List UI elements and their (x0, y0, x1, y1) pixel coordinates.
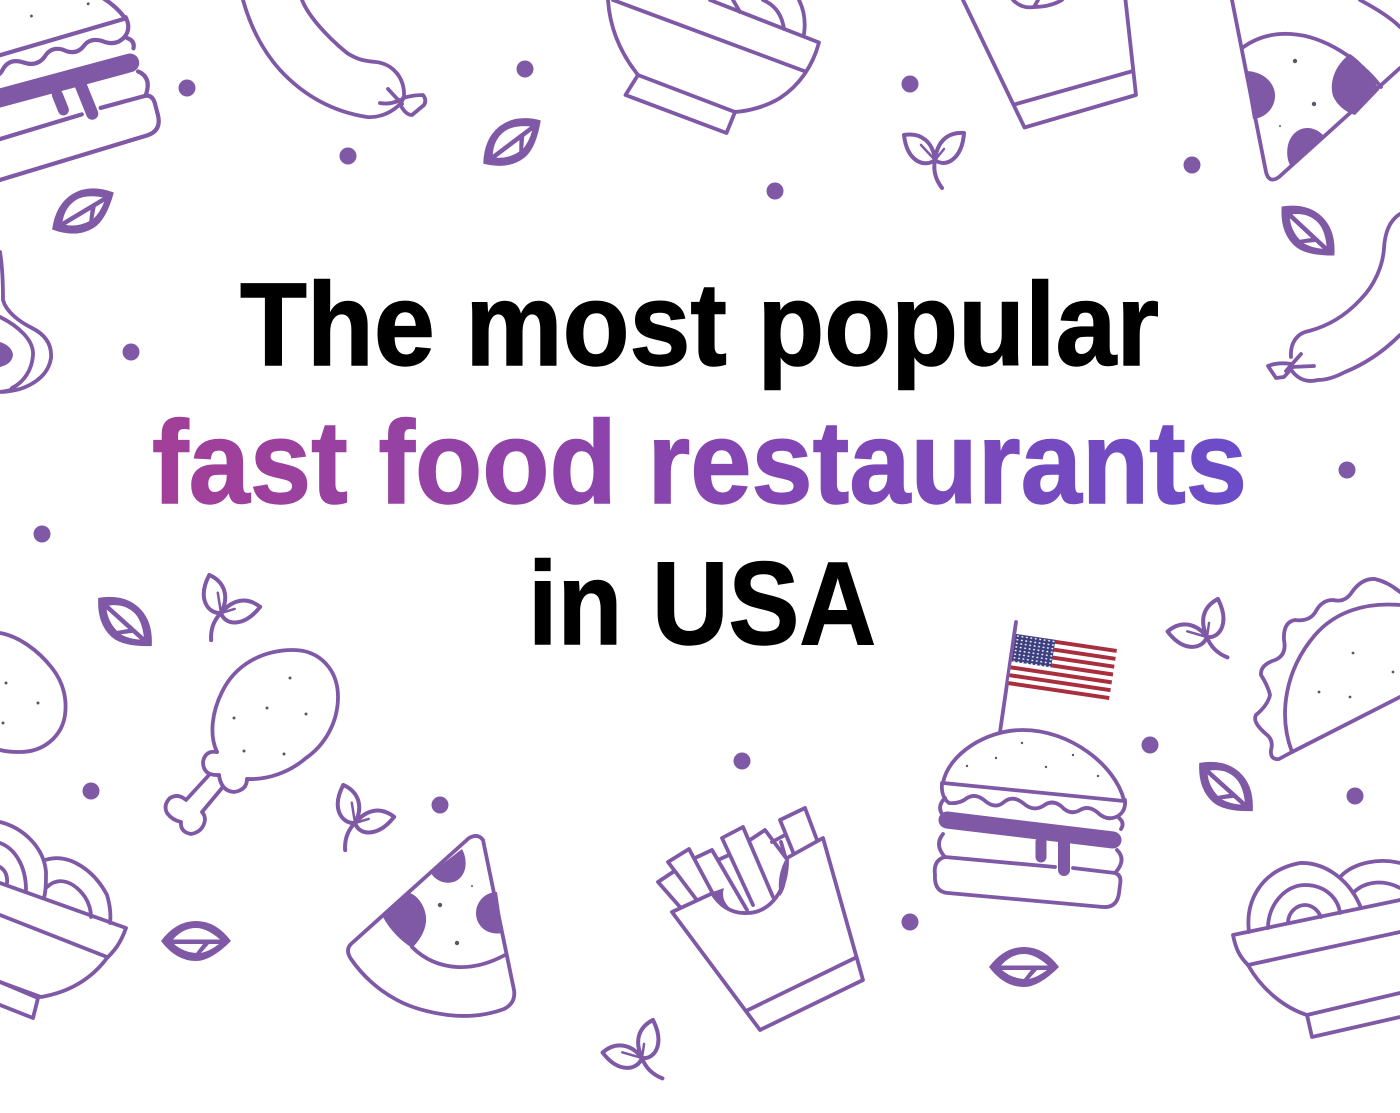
icon: leaf (161, 921, 231, 961)
icon: chicken leg (166, 650, 338, 834)
title line 2: fast food restaurants (152, 397, 1247, 529)
icon: bowl bottom right (1233, 861, 1400, 1037)
icon: leaf (471, 104, 553, 180)
flag pole (1000, 622, 1016, 732)
icon: bowl left (0, 822, 126, 1018)
icon: chicken drumstick left (0, 252, 51, 393)
icon: leaf (1186, 748, 1266, 826)
icon: sausage top (243, 0, 425, 117)
title (152, 259, 1247, 670)
icon: drink cup top (963, 0, 1136, 128)
icon: pizza bottom (348, 836, 514, 1016)
icon: sausage right (1268, 214, 1400, 381)
title line 3: in USA (528, 538, 876, 670)
American flag (1008, 634, 1117, 700)
icon: leaf (85, 583, 165, 661)
icon: burger top left (0, 0, 170, 205)
icon: leaf (42, 175, 124, 247)
icon: sprout (314, 783, 394, 862)
icon: sprout (180, 573, 260, 652)
icon: pizza top right (1232, 0, 1400, 180)
icon: taco (1255, 579, 1400, 759)
icon: bowl top (608, 0, 819, 133)
icon: potato left (0, 633, 66, 752)
decorative dots (34, 60, 1364, 930)
icon: sprout (904, 133, 964, 188)
icon: sprout (601, 1020, 681, 1098)
icon: leaf (1268, 192, 1348, 270)
icon: french fries (658, 808, 863, 1030)
icon: burger with American flag (935, 622, 1125, 907)
icon: sprout (1166, 599, 1246, 677)
title line 1: The most popular (240, 259, 1159, 391)
icon: leaf (989, 947, 1059, 987)
